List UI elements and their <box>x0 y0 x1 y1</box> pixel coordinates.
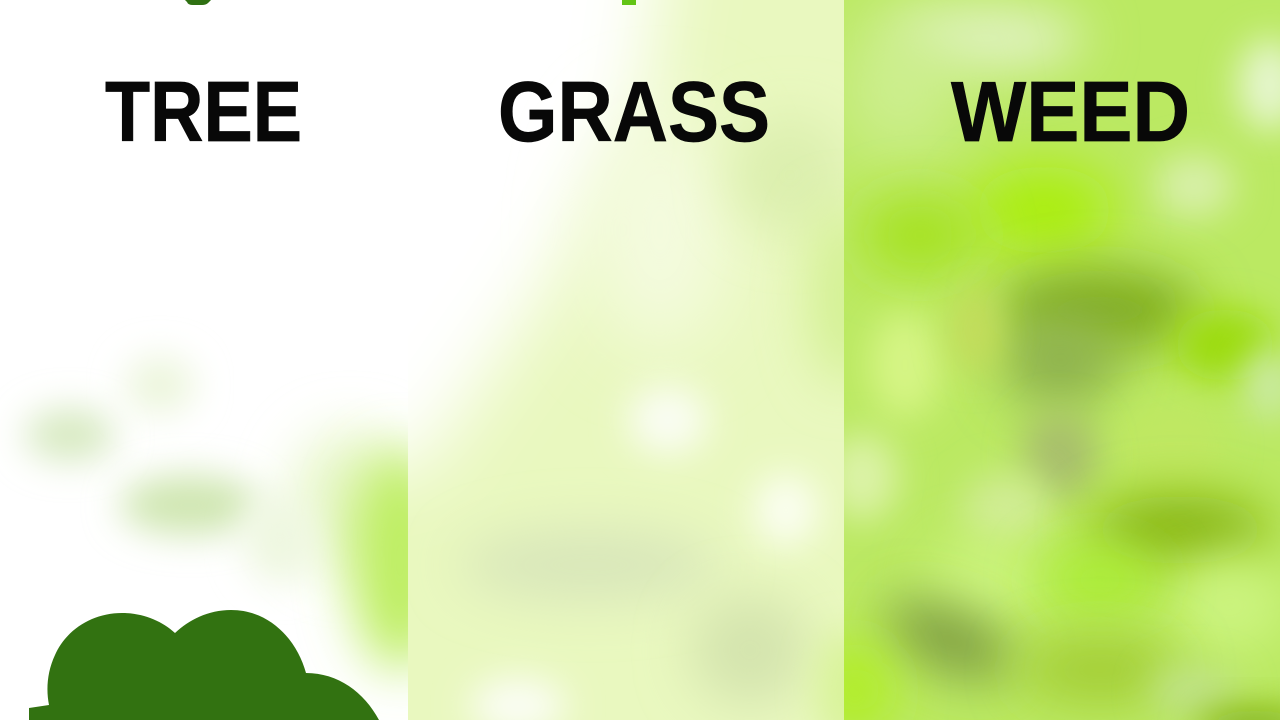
heading: GRASS: GRASS <box>498 65 770 160</box>
panel: weed column background <box>819 0 1280 720</box>
icon: tree canopy <box>29 610 379 720</box>
heading: WEED: WEED <box>951 65 1190 160</box>
heading: TREE: TREE <box>105 65 302 160</box>
heading fragment: cropped title letters <box>185 0 636 5</box>
panel: grass column background <box>408 0 844 720</box>
panel: tree column background <box>12 347 408 703</box>
